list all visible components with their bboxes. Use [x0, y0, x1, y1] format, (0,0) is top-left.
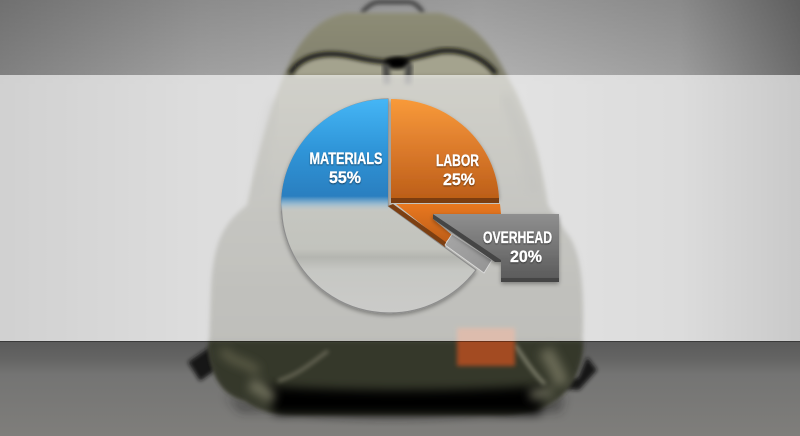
backpack lower folds	[222, 350, 562, 400]
upper body folds	[505, 95, 535, 195]
callout label	[483, 228, 552, 266]
backpack upper pocket	[293, 54, 494, 76]
callout depth edge	[433, 214, 559, 282]
backpack body	[209, 13, 583, 414]
background: blurred backpack	[188, 2, 597, 418]
overhead light tab	[445, 234, 492, 273]
slice: labor	[391, 99, 499, 203]
orange patch	[457, 328, 515, 366]
pie chart	[281, 99, 559, 313]
materials label: 55%	[329, 168, 361, 187]
backpack side straps	[188, 345, 597, 390]
callout face	[433, 214, 559, 278]
background: floor	[0, 341, 800, 436]
labor base edge	[391, 198, 499, 203]
backpack zipper	[290, 50, 496, 74]
backpack top handle	[362, 2, 423, 13]
zipper pull blob	[384, 57, 410, 69]
callout label: 20%	[510, 247, 542, 266]
overhead dark edge	[388, 204, 447, 247]
labor label	[436, 151, 479, 189]
labor label: 25%	[443, 170, 475, 189]
band lower edge	[0, 341, 800, 342]
labor label: LABOR	[436, 151, 479, 170]
backpack bottom darkness	[262, 385, 545, 414]
materials label: MATERIALS	[310, 149, 382, 168]
slice: overhead	[388, 204, 501, 273]
slice: materials	[281, 99, 388, 212]
callout: overhead	[433, 214, 559, 282]
materials label	[310, 149, 382, 187]
background: blurred wall	[0, 0, 800, 345]
slice: grey base of materials	[281, 99, 476, 313]
translucent white band	[0, 75, 800, 341]
callout label: OVERHEAD	[483, 228, 552, 247]
zipper pulls	[386, 64, 409, 84]
backpack floor shadow	[225, 395, 565, 418]
backpack strap highlights	[278, 345, 545, 384]
backpack lower section	[209, 341, 583, 414]
